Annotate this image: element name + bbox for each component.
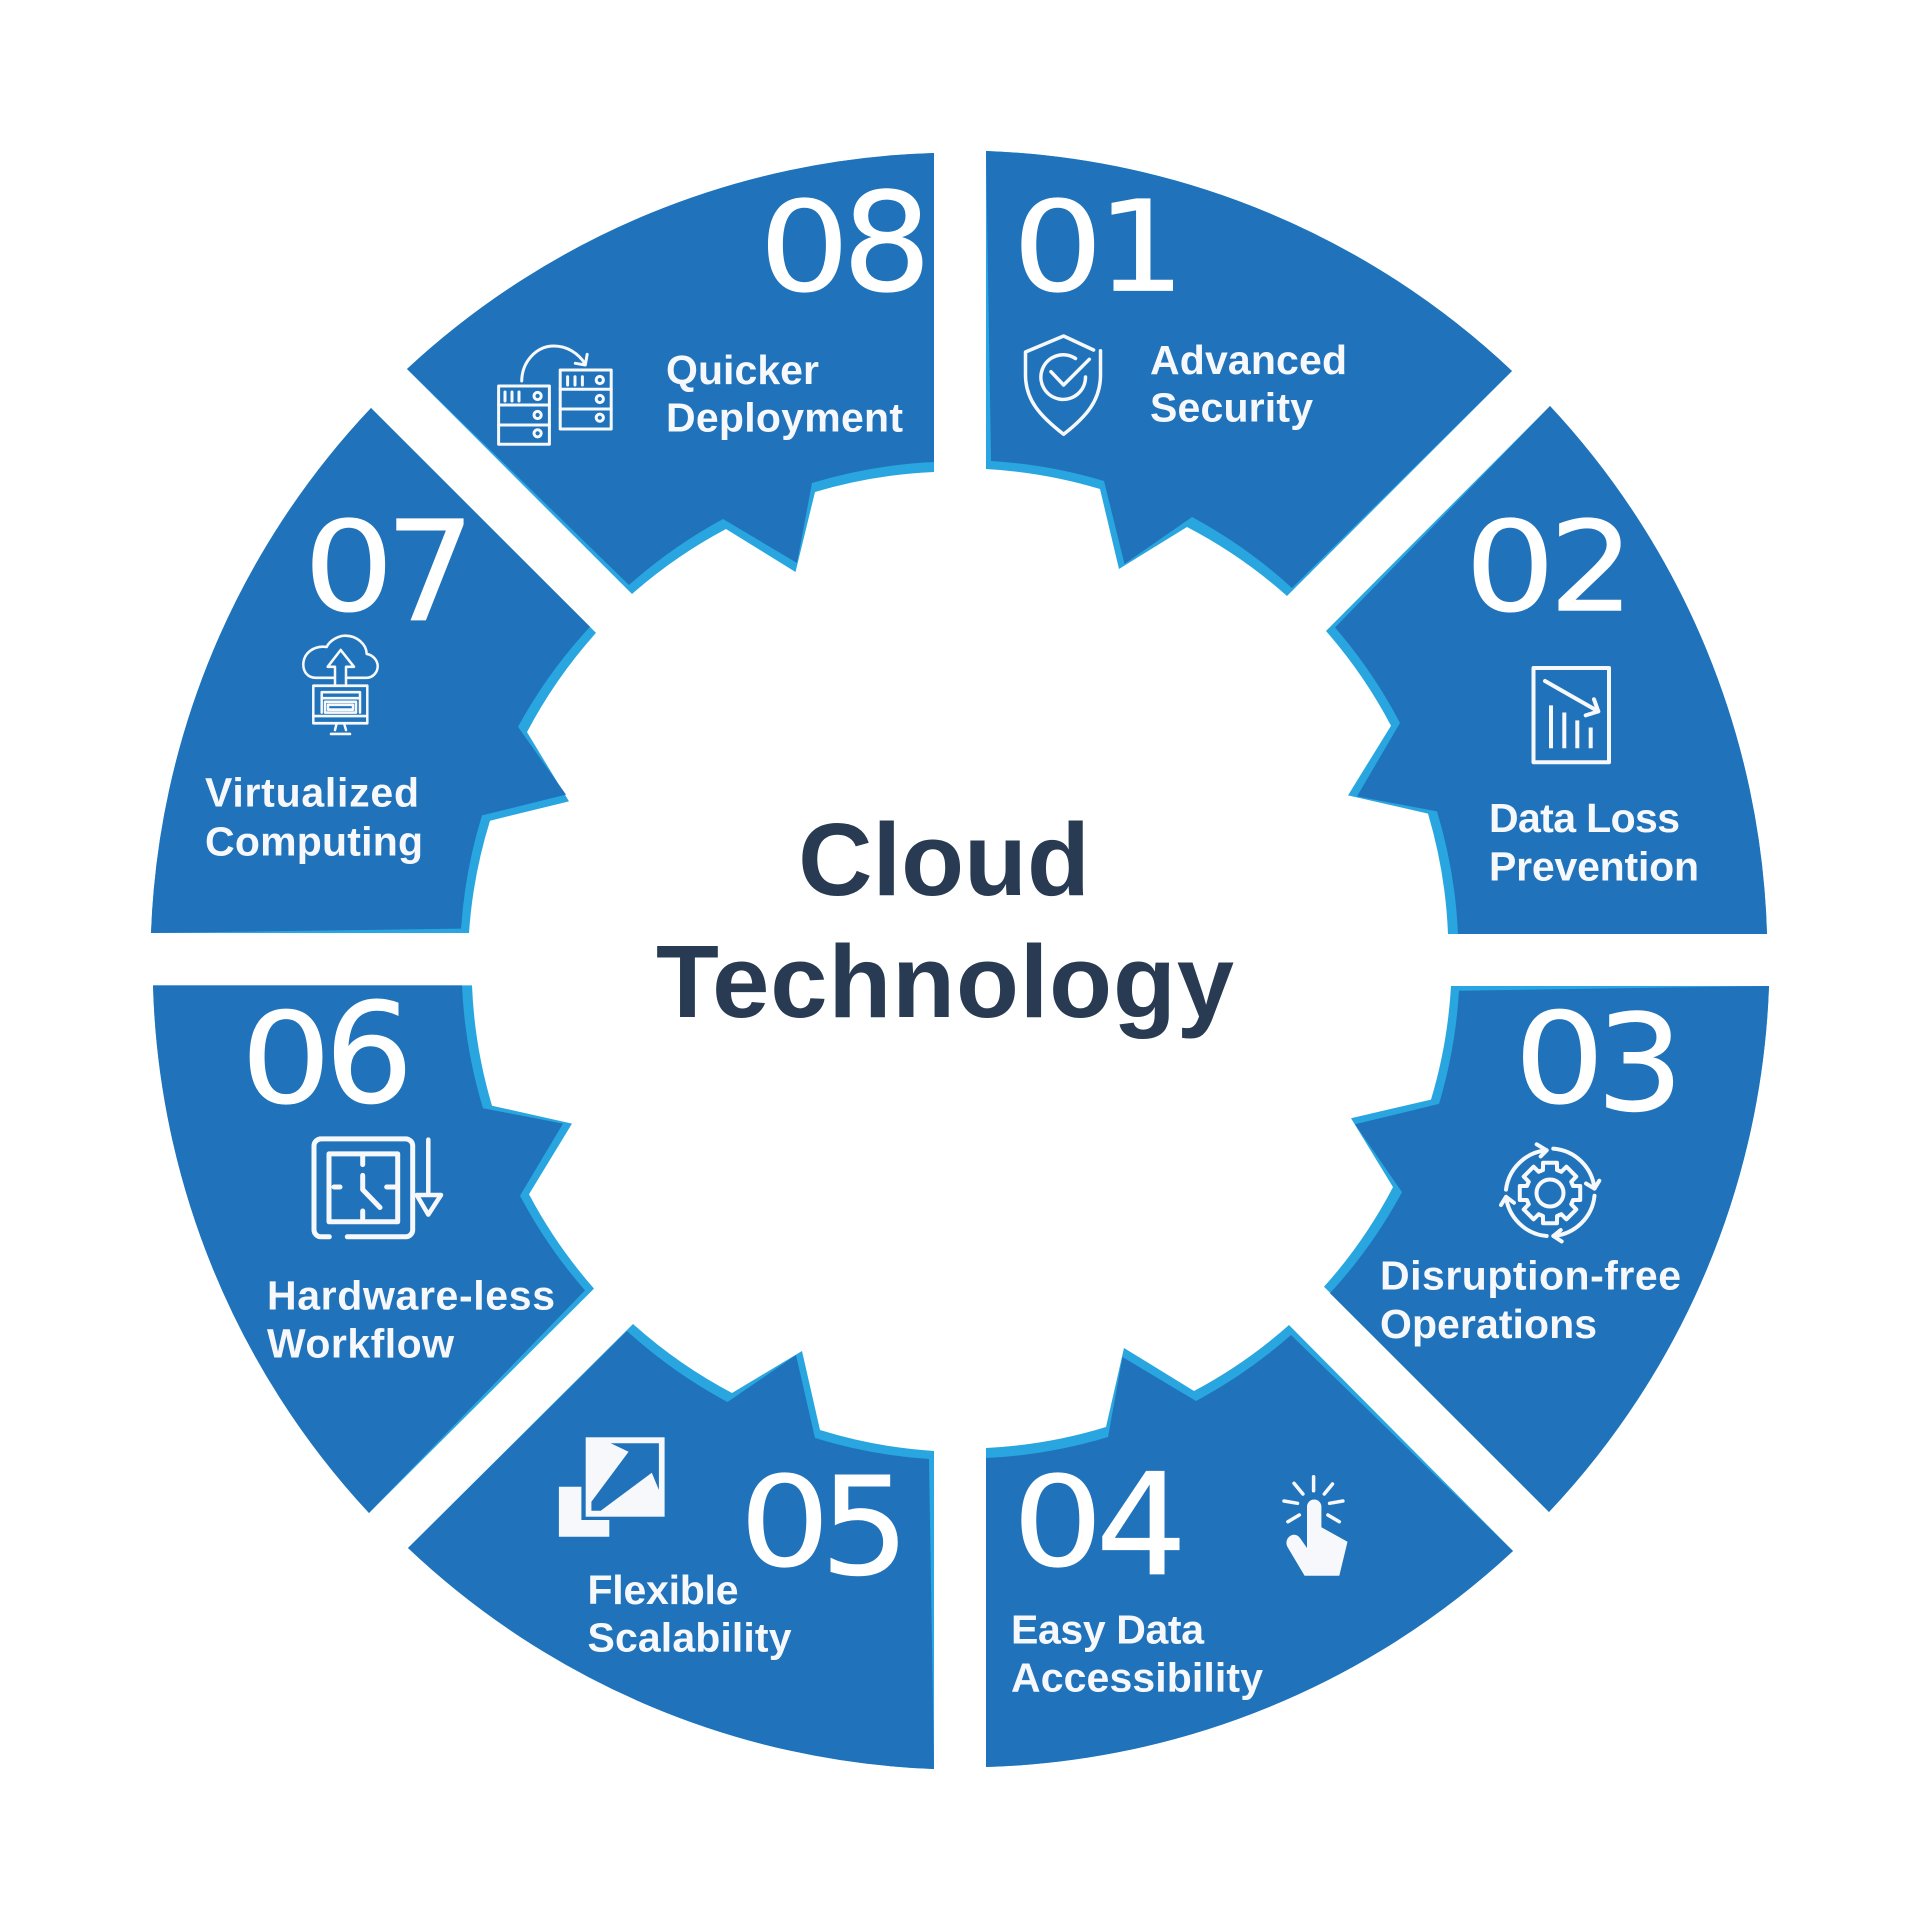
label: Disruption-free Operations: Operations (1380, 1301, 1597, 1347)
number 03: 0 (1514, 986, 1605, 1132)
number 05: 5 (820, 1447, 910, 1606)
label: Flexible Scalability: Scalability (588, 1615, 792, 1661)
label: Flexible Scalability (588, 1567, 792, 1661)
icon: declining chart (1534, 668, 1609, 762)
label: Advanced Security: Advanced (1150, 337, 1347, 383)
panel: 05 Flexible Scalability (408, 1324, 934, 1769)
number 03 (1514, 986, 1684, 1143)
number 04: 4 (1096, 1443, 1187, 1608)
label: Quicker Deployment (666, 347, 903, 441)
number 06 (241, 973, 414, 1135)
title: Cloud Technology: Cloud (798, 802, 1090, 917)
panel: 07 Virtualized Computing (151, 408, 596, 933)
label: Hardware-less Workflow: Hardware-less (267, 1272, 555, 1318)
icon: cloud upload to computer (303, 636, 378, 734)
icon: scale up squares (559, 1437, 665, 1537)
label: Quicker Deployment: Quicker (666, 347, 819, 393)
label: Advanced Security (1150, 337, 1347, 431)
icon: gear with cycle arrows (1501, 1144, 1599, 1241)
number 02: 0 (1465, 494, 1556, 640)
icon: shield with check (1026, 336, 1100, 434)
number 04 (1012, 1443, 1187, 1608)
label: Virtualized Computing: Virtualized (205, 769, 419, 815)
title: Cloud Technology (656, 802, 1234, 1039)
number 07: 7 (385, 492, 475, 654)
label: Easy Data Accessibility: Easy Data (1011, 1606, 1205, 1652)
panel: 06 Hardware-less Workflow (153, 973, 594, 1513)
label: Disruption-free Operations (1380, 1253, 1681, 1347)
label: Data Loss Prevention (1489, 795, 1699, 889)
number 02: 2 (1549, 495, 1634, 640)
number 01: 0 (1012, 174, 1103, 320)
panel: 01 Advanced Security (986, 151, 1512, 596)
number 08: 0 (759, 174, 850, 320)
label: Hardware-less Workflow: Workflow (267, 1320, 454, 1366)
number 08 (759, 163, 932, 323)
number 07 (303, 492, 475, 654)
label: Virtualized Computing: Computing (205, 818, 423, 864)
label: Disruption-free Operations: Disruption-free (1380, 1253, 1681, 1299)
number 07: 0 (303, 494, 394, 640)
number 05: 0 (739, 1449, 830, 1595)
label: Data Loss Prevention: Data Loss (1489, 795, 1680, 841)
number 02 (1465, 494, 1634, 640)
number 01: 1 (1096, 174, 1186, 321)
panel: 03 Disruption-free Operations (1324, 986, 1769, 1512)
label: Advanced Security: Security (1150, 385, 1313, 431)
number 03: 3 (1596, 987, 1684, 1143)
panel: 02 Data Loss Prevention (1326, 406, 1767, 934)
number 06: 0 (241, 986, 332, 1132)
label: Virtualized Computing (205, 769, 423, 864)
number 08: 8 (842, 163, 932, 323)
number 04: 0 (1012, 1449, 1103, 1595)
label: Easy Data Accessibility: Accessibility (1011, 1655, 1263, 1701)
icon: tapping hand (1284, 1477, 1348, 1576)
label: Flexible Scalability: Flexible (588, 1567, 738, 1613)
title: Cloud Technology: Technology (656, 924, 1234, 1039)
icon: clock with down arrow (314, 1139, 441, 1237)
panel: 08 Quicker Deployment (407, 153, 934, 594)
label: Easy Data Accessibility (1011, 1606, 1263, 1701)
panel: 04 Easy Data Accessibility (986, 1325, 1513, 1767)
label: Hardware-less Workflow (267, 1272, 555, 1366)
label: Data Loss Prevention: Prevention (1489, 843, 1699, 889)
number 05 (739, 1447, 910, 1606)
number 01 (1012, 174, 1186, 321)
label: Quicker Deployment: Deployment (666, 395, 903, 441)
icon: server migration (499, 346, 611, 444)
number 06: 6 (324, 973, 414, 1135)
